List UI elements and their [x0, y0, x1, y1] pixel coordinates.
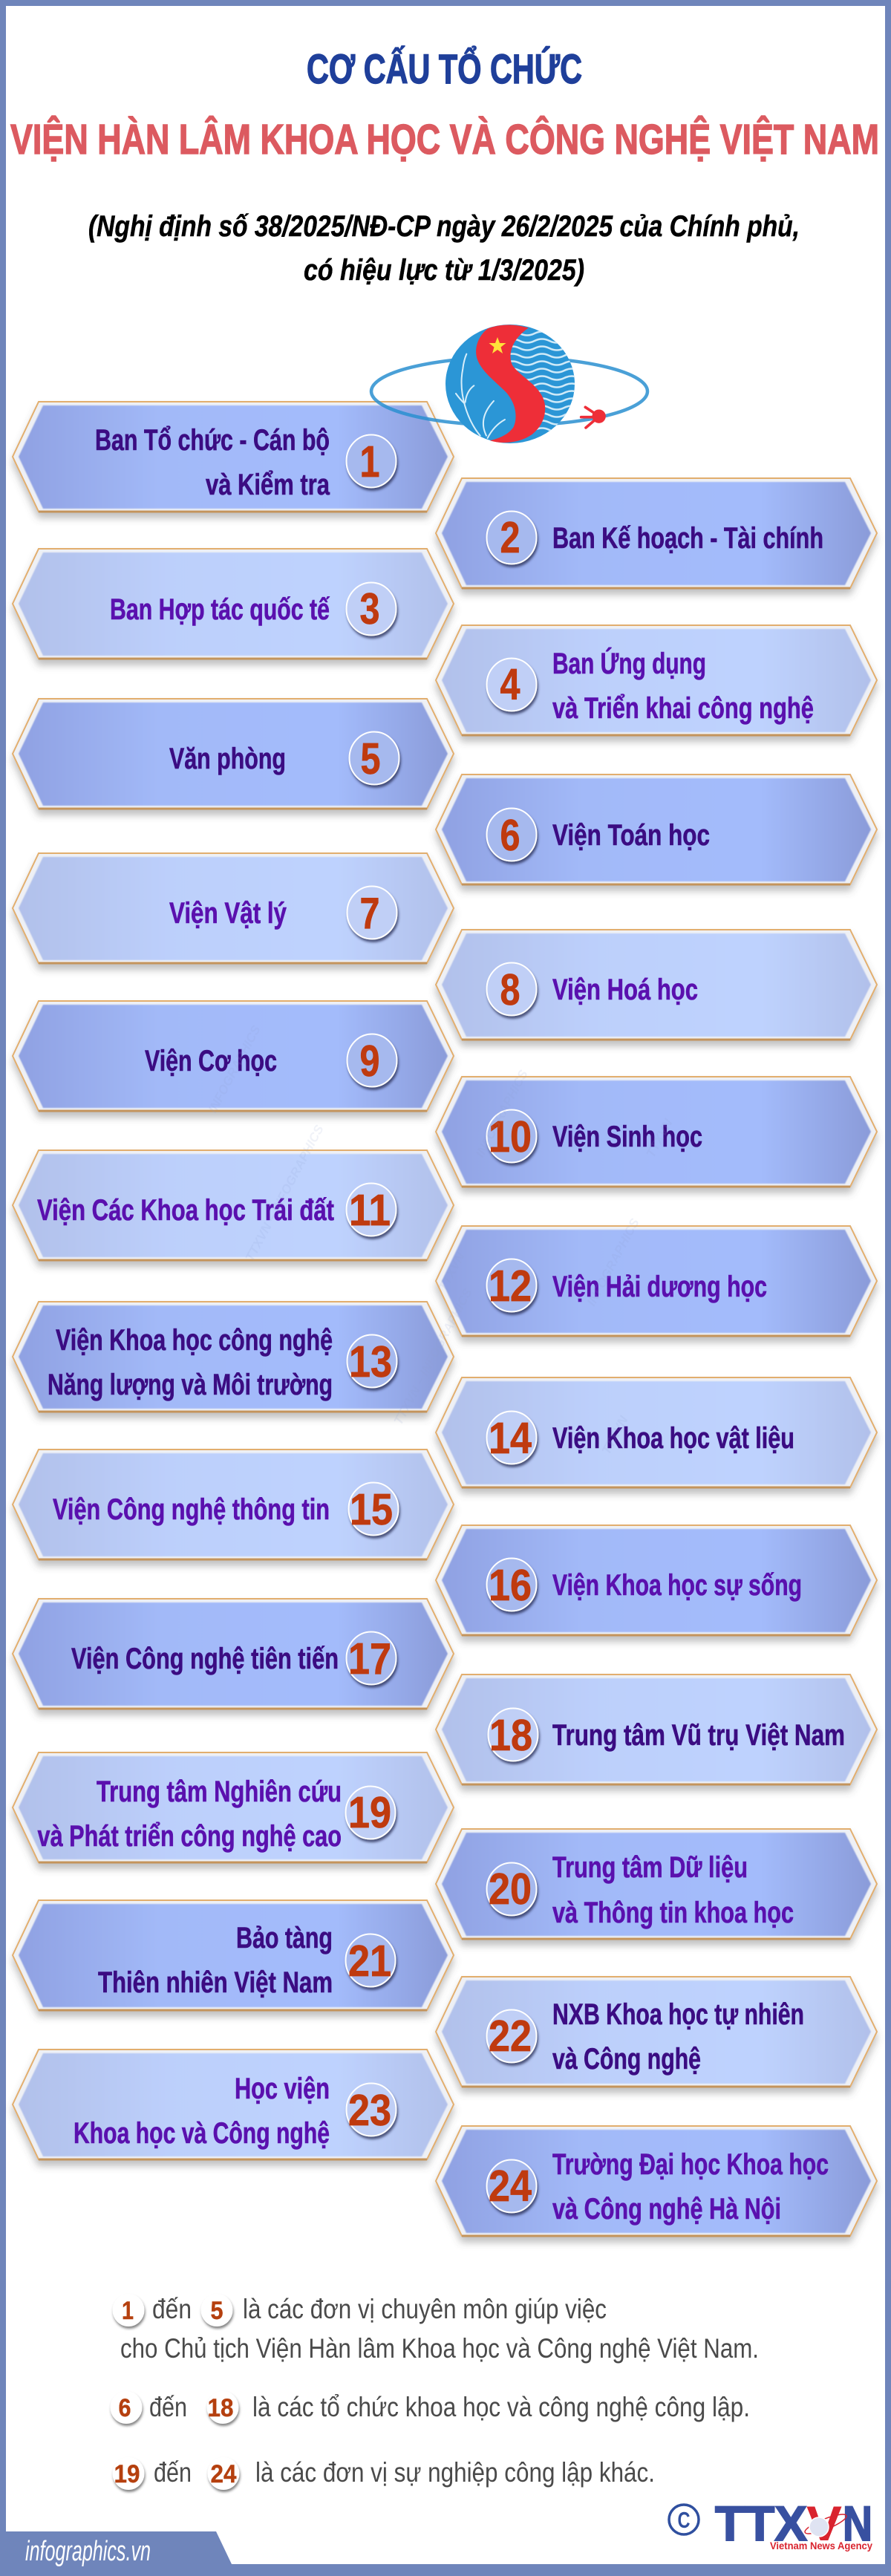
unit 16: Viện Khoa học sự sống — [552, 1569, 802, 1602]
unit 19: 19 — [348, 1788, 391, 1837]
logo satellite — [581, 407, 604, 428]
unit 14: 14 — [489, 1414, 532, 1463]
unit 11: 11 — [349, 1186, 391, 1235]
N letter: N — [843, 2496, 872, 2551]
unit 17 — [13, 1599, 454, 1709]
unit 12 — [436, 1226, 877, 1336]
unit 23: Học viện — [235, 2073, 330, 2105]
footer tab: infographics.vn: infographics.vn — [25, 2536, 151, 2567]
unit 11 — [13, 1150, 454, 1260]
note 1: đến — [152, 2294, 192, 2324]
unit 14 — [436, 1377, 877, 1487]
unit 1 — [13, 402, 454, 512]
copyright mark — [669, 2505, 699, 2534]
unit 22: và Công nghệ — [552, 2043, 701, 2076]
unit 21 — [13, 1900, 454, 2010]
badge 1 — [113, 2294, 144, 2326]
badge 24: 24 — [211, 2460, 237, 2488]
unit 10: 10 — [489, 1112, 532, 1161]
unit 13: Viện Khoa học công nghệ — [56, 1324, 333, 1357]
unit 20 — [436, 1829, 877, 1939]
unit 16 — [436, 1525, 877, 1635]
unit 21: Thiên nhiên Việt Nam — [98, 1966, 333, 1999]
unit 18 — [436, 1675, 877, 1784]
unit 23 — [13, 2050, 454, 2159]
text: TTXVN — [644, 1116, 676, 1160]
unit 3 — [13, 549, 454, 659]
unit 10 — [436, 1077, 877, 1187]
unit 7: Viện Vật lý — [169, 897, 287, 930]
unit 20: và Thông tin khoa học — [552, 1897, 794, 1929]
badge 5 — [200, 2294, 233, 2326]
unit 9: Viện Cơ học — [145, 1045, 277, 1077]
badge 18: 18 — [208, 2394, 233, 2422]
V letter: V — [806, 2496, 842, 2551]
unit 12: 12 — [489, 1262, 532, 1311]
unit 8 — [436, 930, 877, 1040]
agency logo: TTXVN — [669, 2496, 872, 2551]
text: TTXVN – INFOGRAPHICS — [243, 1122, 327, 1264]
text: INFOGRAPHICS — [473, 1067, 531, 1160]
unit 4: và Triển khai công nghệ — [552, 692, 814, 725]
TTX letters: TTX — [715, 2496, 807, 2551]
unit 10: Viện Sinh học — [552, 1121, 702, 1153]
unit 7 — [13, 853, 454, 963]
unit 16: 16 — [489, 1561, 532, 1610]
unit 8: Viện Hoá học — [552, 974, 698, 1006]
unit 19: và Phát triển công nghệ cao — [37, 1820, 342, 1853]
unit 17: Viện Công nghệ tiên tiến — [71, 1643, 339, 1675]
unit 2: 2 — [500, 513, 520, 562]
logo red S — [476, 325, 545, 443]
unit 19 — [13, 1752, 454, 1862]
note 3 — [113, 2457, 655, 2490]
unit 21: 21 — [348, 1937, 391, 1986]
note 2: là các tổ chức khoa học và công nghệ công lập. — [252, 2392, 750, 2422]
unit 15: Viện Công nghệ thông tin — [53, 1493, 330, 1526]
unit 3: Ban Hợp tác quốc tế — [110, 593, 330, 626]
logo globe — [446, 325, 575, 443]
unit 21: Bảo tàng — [236, 1922, 333, 1954]
note 1: là các đơn vị chuyên môn giúp việc — [243, 2294, 607, 2324]
unit 22: NXB Khoa học tự nhiên — [552, 1998, 804, 2031]
badge 6 — [110, 2391, 143, 2424]
text: INFOGRAPHICS — [206, 1023, 264, 1115]
unit 22: 22 — [489, 2012, 532, 2061]
unit 6: 6 — [500, 811, 520, 860]
unit 2 — [436, 478, 877, 588]
agency name: Vietnam News Agency — [770, 2540, 872, 2551]
unit 4: 4 — [500, 660, 520, 709]
globe — [803, 2511, 848, 2537]
unit 24 — [436, 2126, 877, 2236]
unit 19: Trung tâm Nghiên cứu — [97, 1776, 342, 1808]
unit 14: Viện Khoa học vật liệu — [552, 1422, 794, 1455]
unit 13: 13 — [349, 1337, 392, 1386]
text: TTXVN – INFOGRAPHICS — [391, 1285, 475, 1427]
note 2: đến — [149, 2392, 187, 2422]
unit 13 — [13, 1302, 454, 1412]
logo leaf veins — [456, 354, 505, 438]
unit 12: Viện Hải dương học — [552, 1271, 767, 1303]
unit 8: 8 — [500, 965, 520, 1014]
text: TTXVN — [599, 1413, 631, 1457]
unit 1: Ban Tổ chức - Cán bộ — [95, 424, 330, 457]
note 3: là các đơn vị sự nghiệp công lập khác. — [255, 2457, 655, 2488]
text: INFOGRAPHICS — [584, 1216, 642, 1308]
note 1 — [113, 2294, 759, 2364]
text: TTXVN — [436, 1250, 468, 1294]
unit 24: và Công nghệ Hà Nội — [552, 2193, 781, 2226]
unit 23: Khoa học và Công nghệ — [74, 2117, 330, 2150]
unit 1: và Kiểm tra — [206, 469, 330, 501]
unit 3: 3 — [359, 584, 380, 633]
badge 1: 1 — [122, 2297, 134, 2325]
logo: Vietnam Academy of Science and Technology — [371, 325, 647, 443]
badge 6: 6 — [119, 2394, 131, 2422]
unit 5: 5 — [361, 734, 380, 783]
unit 23: 23 — [348, 2086, 391, 2135]
subtitle: decree reference — [88, 210, 800, 287]
copyright mark: C — [677, 2507, 691, 2533]
unit 7: 7 — [359, 889, 380, 938]
title: line 1: CƠ CẤU TỔ CHỨC — [307, 45, 582, 92]
unit 17: 17 — [348, 1634, 391, 1683]
unit 22 — [436, 1977, 877, 2087]
unit 5: Văn phòng — [169, 743, 286, 775]
unit 24: 24 — [489, 2162, 532, 2211]
unit 20: 20 — [489, 1865, 532, 1914]
unit 20: Trung tâm Dữ liệu — [552, 1851, 748, 1884]
unit 15 — [13, 1450, 454, 1559]
unit 5 — [13, 699, 454, 809]
unit 11: Viện Các Khoa học Trái đất — [37, 1194, 334, 1227]
logo star — [489, 337, 506, 353]
note 3: đến — [154, 2457, 192, 2488]
unit 18: 18 — [489, 1711, 532, 1760]
unit 1: 1 — [359, 437, 380, 486]
badge 19: 19 — [114, 2460, 140, 2488]
note 1: cho Chủ tịch Viện Hàn lâm Khoa học và Công nghệ Việt Nam. — [120, 2333, 759, 2364]
logo orbit — [371, 357, 647, 425]
unit 13: Năng lượng và Môi trường — [48, 1369, 333, 1401]
unit 6 — [436, 775, 877, 884]
note 2 — [110, 2391, 750, 2424]
unit 6: Viện Toán học — [552, 819, 710, 852]
subtitle: decree reference: có hiệu lực từ 1/3/2025) — [304, 254, 584, 287]
unit 9 — [13, 1001, 454, 1111]
logo waves — [511, 331, 575, 431]
unit 4: Ban Ứng dụng — [552, 646, 706, 680]
badge 5: 5 — [211, 2297, 223, 2325]
unit 15: 15 — [350, 1485, 393, 1534]
unit 9: 9 — [359, 1037, 380, 1086]
unit 4 — [436, 625, 877, 735]
